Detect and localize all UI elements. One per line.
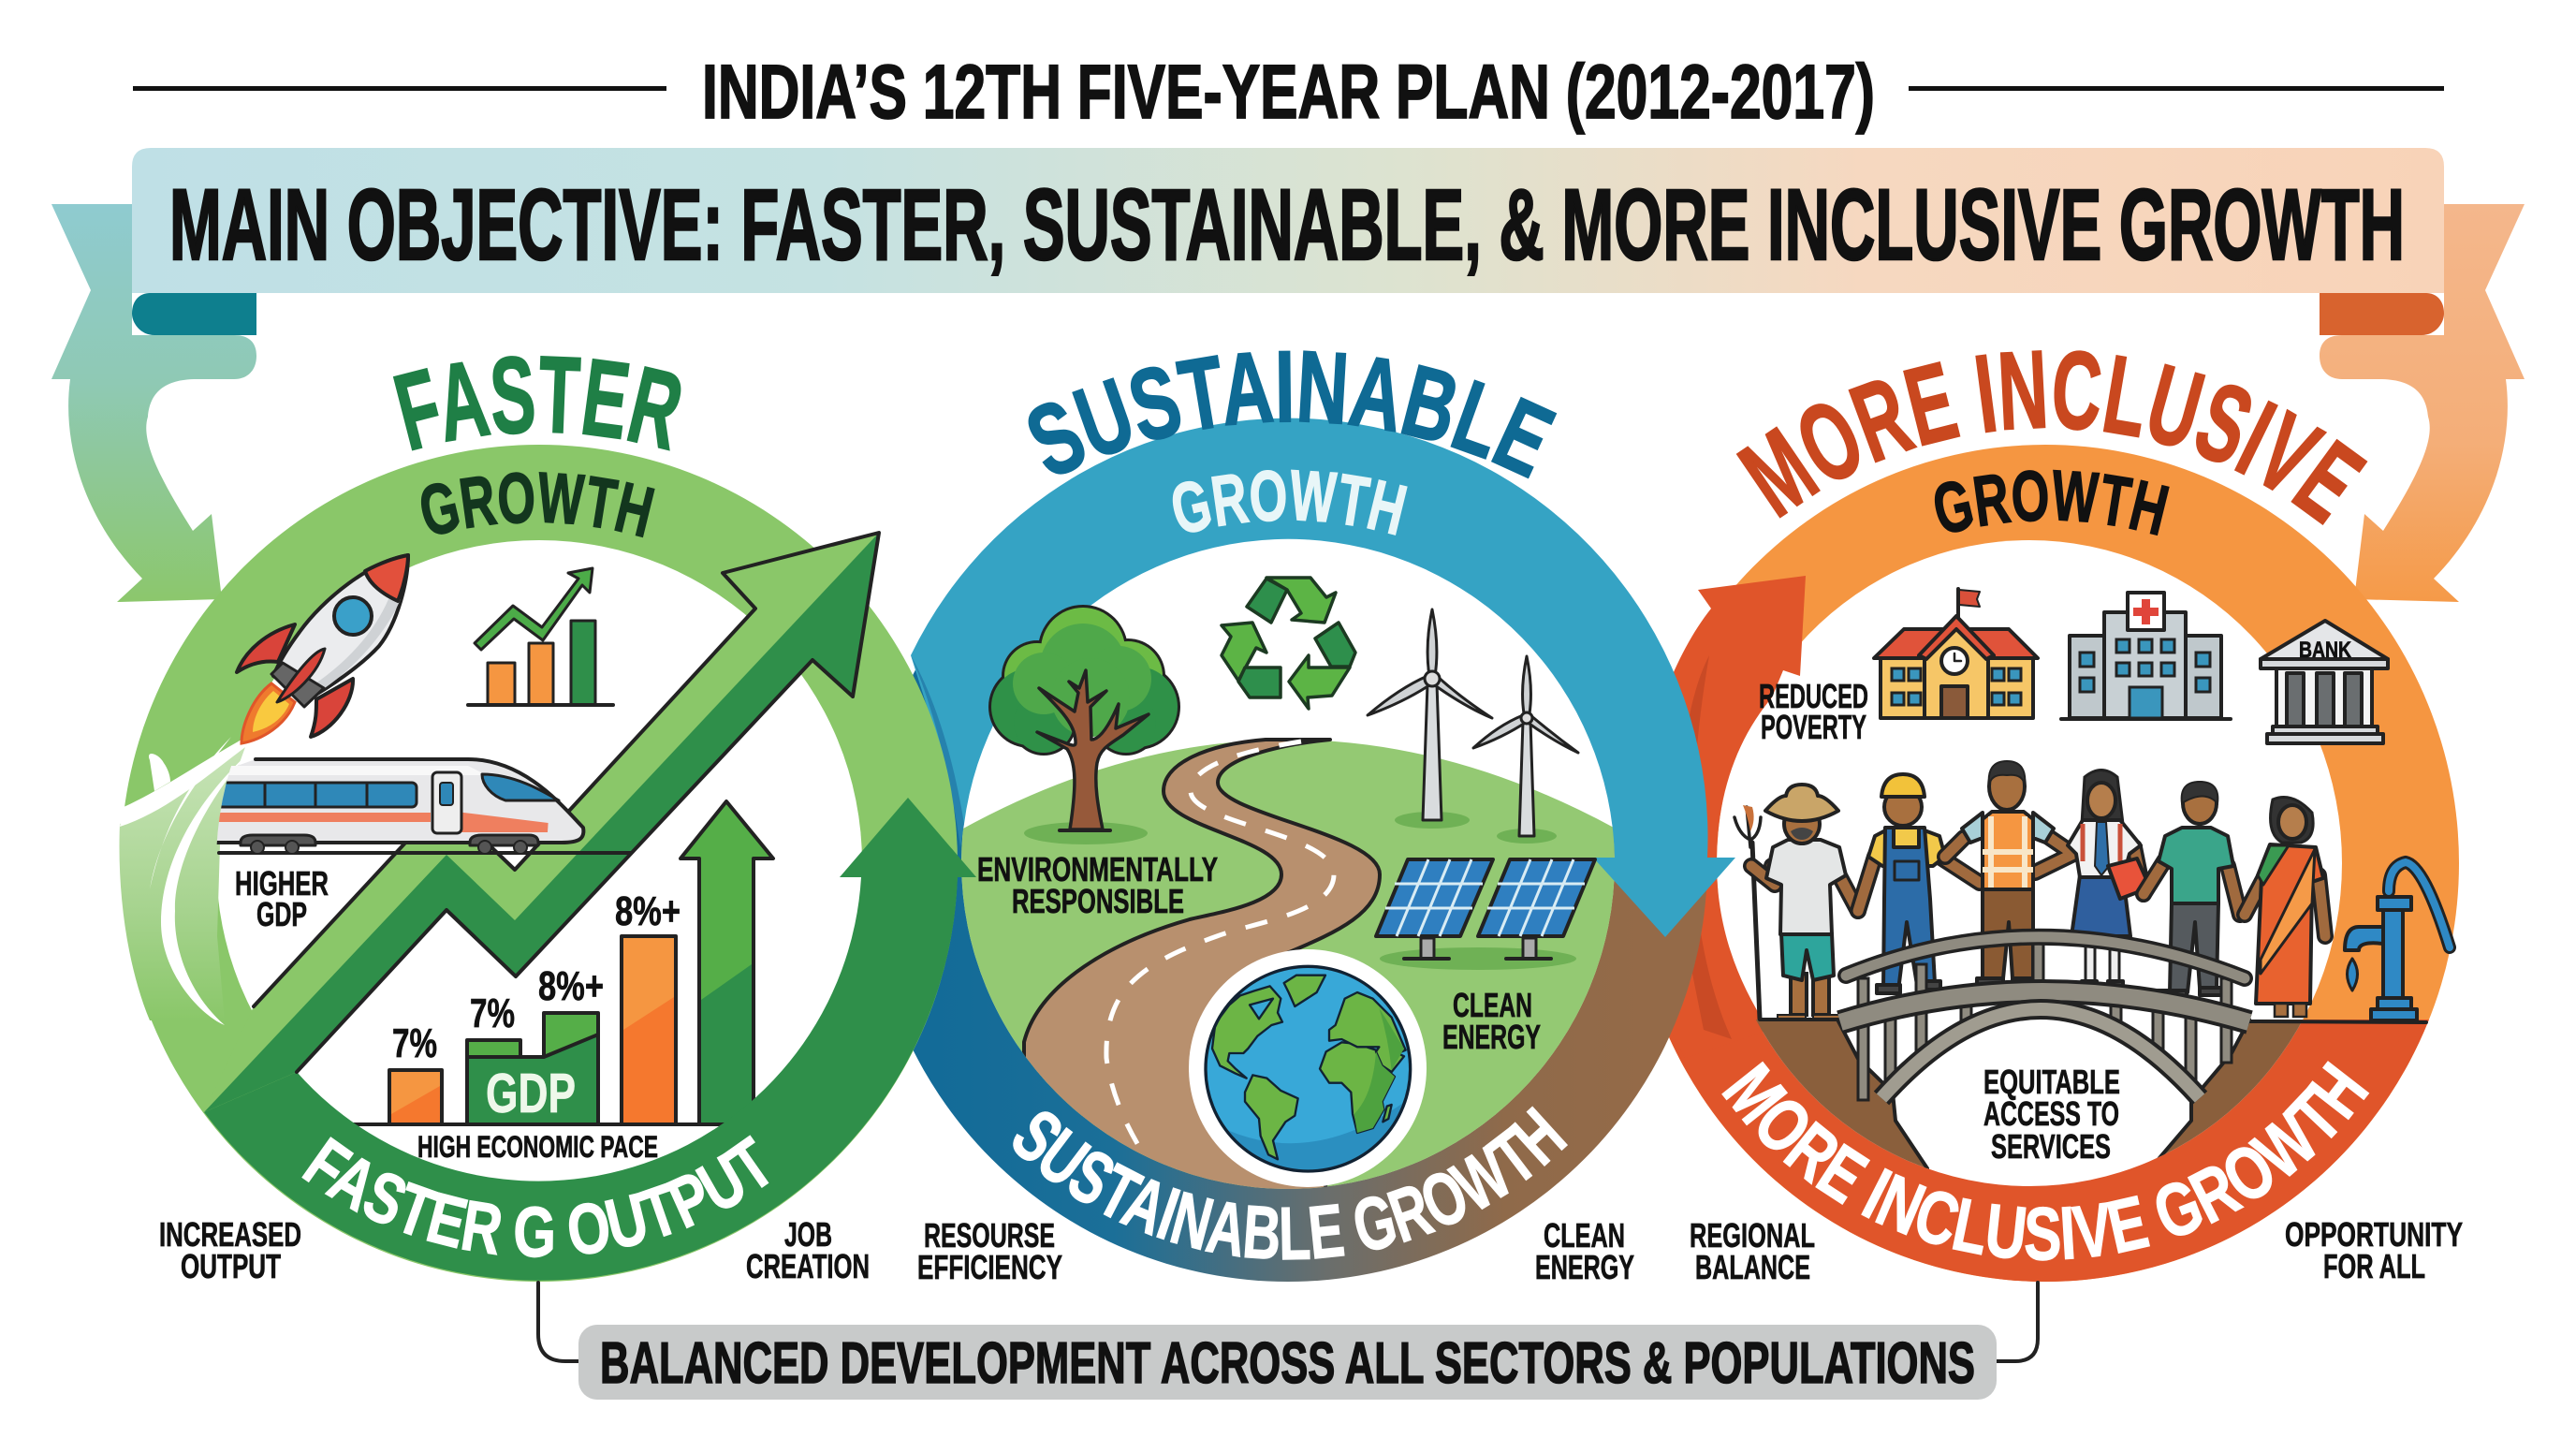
person: farmer (1734, 785, 1858, 1019)
ribbon fold left (132, 293, 256, 335)
label: regional balance: REGIONAL (1690, 1216, 1815, 1255)
arrow: blue arc with head (911, 418, 1735, 937)
inner scene (955, 536, 1624, 1217)
GDP box (467, 1034, 598, 1124)
chart value labels: 7% (470, 990, 515, 1036)
icon: recycle symbol (1222, 578, 1355, 709)
person: woman in saree (2245, 797, 2325, 1017)
bar chart: GDP (350, 801, 773, 1124)
bridge (1840, 937, 2249, 1100)
bottom bar: balanced development: BALANCED DEVELOPMENT ACROSS ALL SECTORS & POPULATIONS (600, 1331, 1975, 1396)
chart value labels (392, 888, 681, 1164)
ring: dark green lower band with arrow (204, 798, 976, 1281)
label: opportunity for all: FOR ALL (2323, 1247, 2425, 1285)
chart value labels: HIGH ECONOMIC PACE (417, 1130, 658, 1164)
label: increased output (159, 1215, 301, 1285)
chart value labels: 8%+ (538, 963, 604, 1009)
label: clean energy: ENERGY (1535, 1248, 1634, 1286)
person: construction worker (1858, 774, 1980, 993)
person: man in green shirt (2144, 782, 2240, 998)
person: safety vest worker (1945, 761, 2073, 986)
inner white area (1717, 540, 2342, 1186)
arrow: right ribbon tail into Inclusive ring (2320, 204, 2525, 602)
label: equitable access: SERVICES (1991, 1127, 2111, 1166)
panel: more inclusive growth (1669, 445, 2459, 1282)
icon: tree (988, 605, 1180, 844)
connector right (1997, 1283, 2038, 1361)
icon: growth chart (468, 568, 613, 705)
bar: 8 percent green (542, 1011, 600, 1055)
bar: tall orange (622, 936, 676, 1124)
ring: red lower band (1669, 1020, 2429, 1282)
label: clean energy inside: ENERGY (1442, 1018, 1541, 1056)
label: clean energy inside (1442, 986, 1541, 1056)
winding road (1024, 740, 1380, 1208)
ring: orange (1632, 445, 2459, 1282)
heading: inclusive growth: GROWTH (1934, 470, 2170, 536)
label: opportunity for all: OPPORTUNITY (2285, 1215, 2463, 1254)
label: faster output arc: FASTER G OUTPUT (301, 1135, 769, 1258)
icon: solar panels (1376, 859, 1595, 970)
inner white area (216, 540, 862, 1186)
label: higher GDP (235, 864, 329, 933)
icon: globe (1189, 949, 1427, 1187)
label: environmentally responsible: RESPONSIBLE (1012, 882, 1184, 920)
ribbon fold right (2320, 293, 2444, 335)
heading: sustainable: SUSTAINABLE (1028, 350, 1558, 479)
icon: hospital (2061, 593, 2231, 719)
label: job creation: JOB (784, 1215, 832, 1254)
label: higher GDP: GDP (256, 895, 307, 933)
heading: sustainable growth: GROWTH (1172, 470, 1408, 536)
icon: water pump (2345, 862, 2450, 1020)
heading: more inclusive: MORE INCLUSIVE (1735, 350, 2368, 525)
bar: 7 percent (389, 1070, 442, 1124)
chart value labels: 7% (392, 1020, 437, 1066)
label: more inclusive growth arc: MORE INCLUSIVE GROWTH (1721, 1061, 2370, 1261)
label: equitable access (1983, 1063, 2120, 1166)
title: INDIA’S 12TH FIVE-YEAR PLAN (2012-2017) (702, 50, 1875, 135)
label: reduced poverty: REDUCED (1759, 677, 1868, 715)
label: increased output: INCREASED (159, 1215, 301, 1254)
icon: bullet train (206, 759, 583, 854)
label: job creation: CREATION (746, 1247, 870, 1285)
label: sustainable growth arc: SUSTAINABLE GROWTH (1013, 1107, 1568, 1260)
label: clean energy inside: CLEAN (1453, 986, 1532, 1024)
arrow: rising green (681, 801, 773, 1124)
ground and banks (1756, 1019, 2303, 1169)
label: higher GDP: HIGHER (235, 864, 329, 902)
person: student (2068, 770, 2150, 987)
bottom bar: balanced development (578, 1325, 1997, 1400)
label: job creation (746, 1215, 870, 1285)
ground line (1760, 1020, 2426, 1022)
hill (955, 740, 1624, 1217)
panel: sustainable growth (911, 418, 1735, 1282)
arrow: red swoosh (1633, 576, 1806, 1058)
speed swoosh (119, 737, 250, 1025)
connector left (538, 1283, 578, 1361)
rail line (219, 851, 631, 855)
label: regional balance: BALANCE (1695, 1248, 1810, 1286)
label: regional balance (1690, 1216, 1815, 1286)
ring: blue to brown base (869, 443, 1707, 1282)
icon: bank: BANK (2299, 638, 2352, 663)
label: environmentally responsible (977, 850, 1218, 920)
bar: 7 percent green (465, 1038, 522, 1057)
arrow: big zigzag growth arrow (204, 533, 879, 1112)
label: equitable access: EQUITABLE (1983, 1063, 2120, 1101)
ring: light green (121, 445, 958, 1282)
label: equitable access: ACCESS TO (1983, 1094, 2119, 1133)
people group (1734, 761, 2325, 1019)
label: environmentally responsible: ENVIRONMENTALLY (977, 850, 1218, 888)
icon: school (1874, 589, 2038, 718)
label: resource efficiency: EFFICIENCY (917, 1248, 1062, 1286)
label: opportunity for all (2285, 1215, 2463, 1285)
icon: bank (2261, 621, 2388, 743)
icon: rocket (237, 555, 408, 743)
title (133, 50, 2444, 135)
label: clean energy: CLEAN (1544, 1216, 1625, 1255)
road centre dashes (1106, 741, 1334, 1184)
arrow: left ribbon tail into Faster ring (51, 204, 256, 602)
label: resource efficiency (917, 1216, 1062, 1286)
chart baseline (350, 1123, 726, 1126)
chart value labels: GDP (486, 1063, 576, 1124)
label: reduced poverty: POVERTY (1761, 708, 1866, 746)
chart value labels: 8%+ (615, 888, 681, 934)
heading: faster: FASTER (393, 356, 681, 451)
icon: wind turbines (1368, 609, 1578, 844)
panel: faster growth (120, 445, 976, 1282)
label: clean energy (1535, 1216, 1634, 1286)
label: reduced poverty (1759, 677, 1868, 746)
heading: faster growth: GROWTH (421, 472, 655, 537)
label: resource efficiency: RESOURSE (924, 1216, 1055, 1255)
label: increased output: OUTPUT (181, 1247, 281, 1285)
